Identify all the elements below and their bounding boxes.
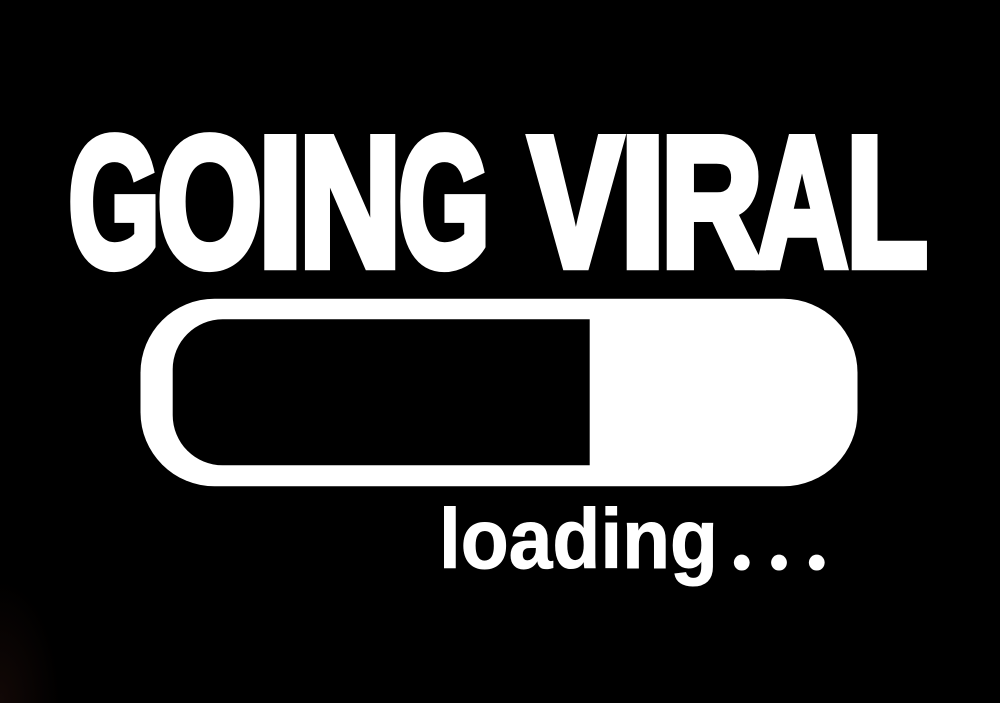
loading label: loading (439, 492, 718, 586)
title: N (299, 99, 401, 305)
title: L (846, 100, 928, 306)
title: V (529, 99, 622, 305)
progress bar (140, 299, 858, 486)
title (68, 98, 928, 306)
title: A (756, 98, 848, 305)
title: G (398, 99, 490, 305)
title: I (257, 100, 303, 306)
title: O (157, 99, 262, 306)
loading label (439, 483, 829, 590)
title: I (620, 100, 666, 306)
title: R (661, 98, 763, 305)
loading label: ... (730, 483, 829, 590)
title: G (68, 99, 160, 305)
